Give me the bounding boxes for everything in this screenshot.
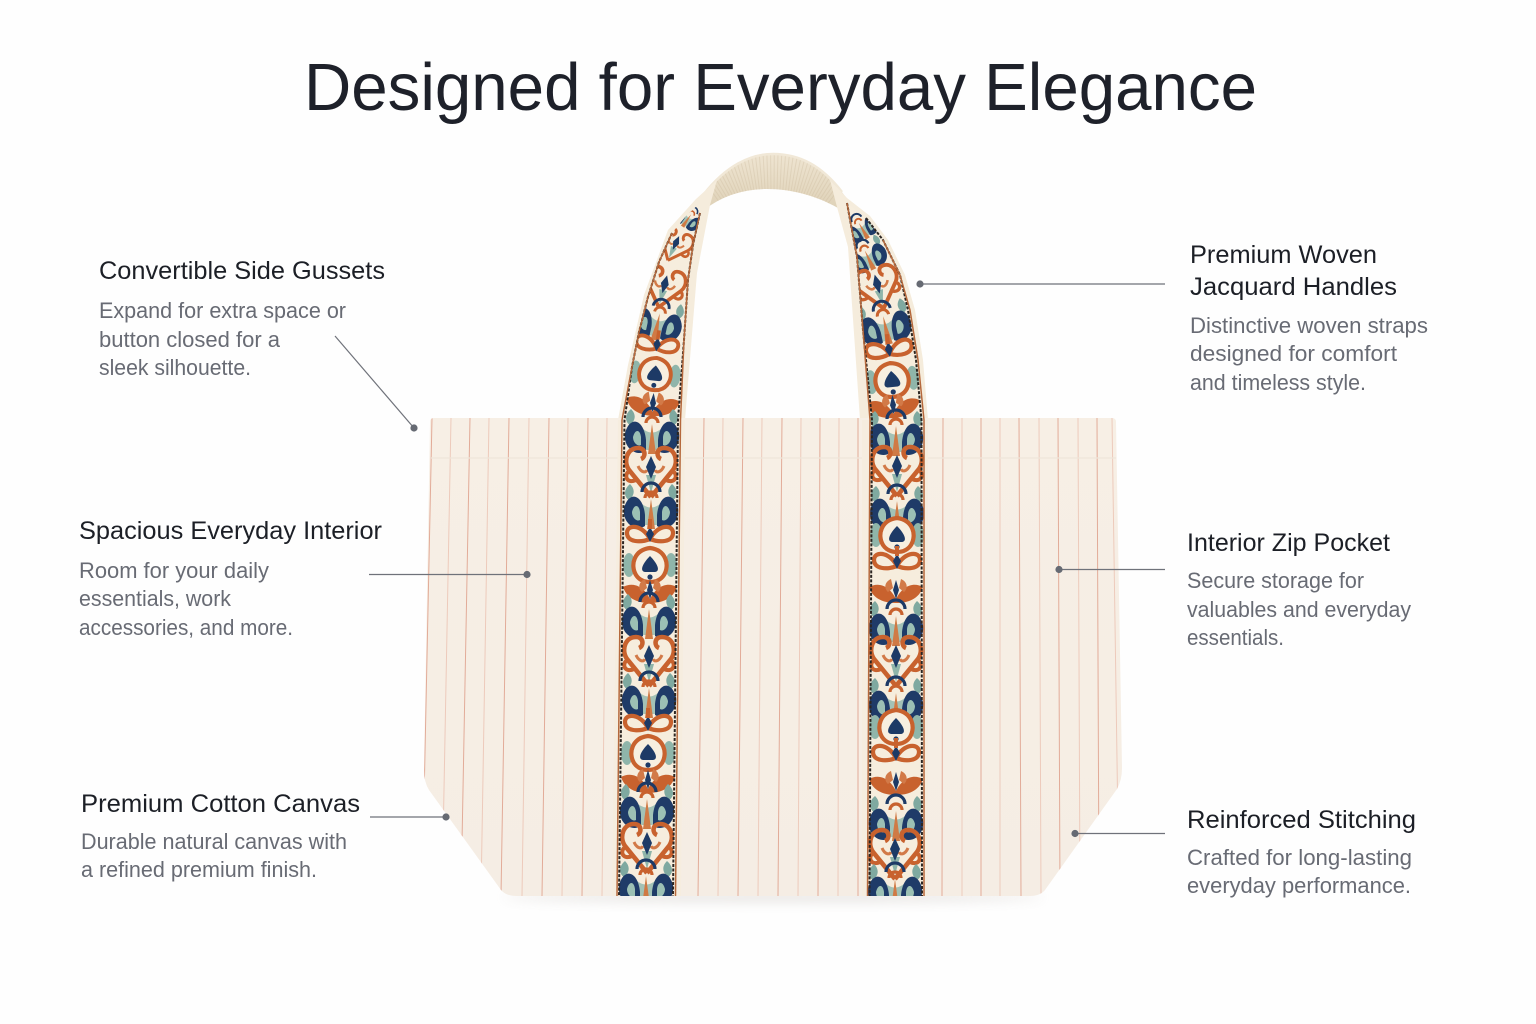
callout: reinforced stitching bbox=[1071, 806, 1416, 898]
left strap cream edging on body bbox=[612, 420, 685, 896]
left jacquard strap bbox=[618, 207, 698, 896]
right strap woven borders bbox=[847, 203, 924, 896]
description: sleek silhouette. bbox=[99, 355, 251, 380]
right strap cream edging on body bbox=[862, 420, 928, 896]
heading: Premium Woven bbox=[1190, 241, 1377, 269]
heading: Convertible Side Gussets bbox=[99, 257, 385, 285]
description: everyday performance. bbox=[1187, 873, 1411, 898]
heading: Premium Cotton Canvas bbox=[81, 790, 360, 818]
pinstripes bbox=[422, 418, 1119, 896]
callout: spacious everyday interior bbox=[79, 517, 531, 640]
leader line bbox=[335, 336, 418, 432]
description: a refined premium finish. bbox=[81, 857, 317, 882]
description: Secure storage for bbox=[1187, 568, 1364, 593]
description bbox=[1187, 845, 1412, 898]
heading: Jacquard Handles bbox=[1190, 273, 1397, 301]
canvas body bbox=[424, 418, 1122, 896]
description: and timeless style. bbox=[1190, 370, 1366, 395]
description: essentials, work bbox=[79, 586, 232, 611]
leader line bbox=[370, 813, 450, 821]
description bbox=[99, 298, 346, 380]
callout: interior zip pocket bbox=[1055, 529, 1411, 650]
left handle cream edging bbox=[618, 180, 717, 420]
bag ground shadow bbox=[503, 893, 1043, 901]
description: button closed for a bbox=[99, 327, 281, 352]
description: essentials. bbox=[1187, 625, 1284, 650]
tote bag illustration bbox=[422, 153, 1122, 909]
description: valuables and everyday bbox=[1187, 597, 1411, 622]
right jacquard strap bbox=[850, 212, 924, 896]
description: accessories, and more. bbox=[79, 615, 293, 640]
leader line bbox=[1071, 830, 1165, 837]
description: designed for comfort bbox=[1190, 341, 1397, 366]
leader line bbox=[369, 571, 531, 578]
leader line bbox=[916, 280, 1165, 288]
callout: premium cotton canvas bbox=[81, 790, 450, 882]
callout: convertible side gussets bbox=[99, 257, 418, 432]
heading: Interior Zip Pocket bbox=[1187, 529, 1390, 557]
callout: premium woven jacquard handles bbox=[916, 241, 1428, 395]
description bbox=[79, 558, 293, 640]
description: Distinctive woven straps bbox=[1190, 313, 1428, 338]
leader line bbox=[1055, 566, 1165, 573]
description bbox=[1187, 568, 1411, 650]
right handle cream edging bbox=[830, 180, 928, 420]
description bbox=[81, 829, 347, 882]
description bbox=[1190, 313, 1428, 395]
left strap woven borders bbox=[617, 213, 700, 896]
description: Durable natural canvas with bbox=[81, 829, 347, 854]
handle inner back with ribbed weave bbox=[697, 153, 850, 208]
description: Crafted for long-lasting bbox=[1187, 845, 1412, 870]
description: Expand for extra space or bbox=[99, 298, 346, 323]
heading: Spacious Everyday Interior bbox=[79, 517, 382, 545]
description: Room for your daily bbox=[79, 558, 269, 583]
heading: Reinforced Stitching bbox=[1187, 806, 1416, 834]
heading bbox=[1190, 241, 1397, 301]
title: Designed for Everyday Elegance bbox=[304, 50, 1257, 125]
